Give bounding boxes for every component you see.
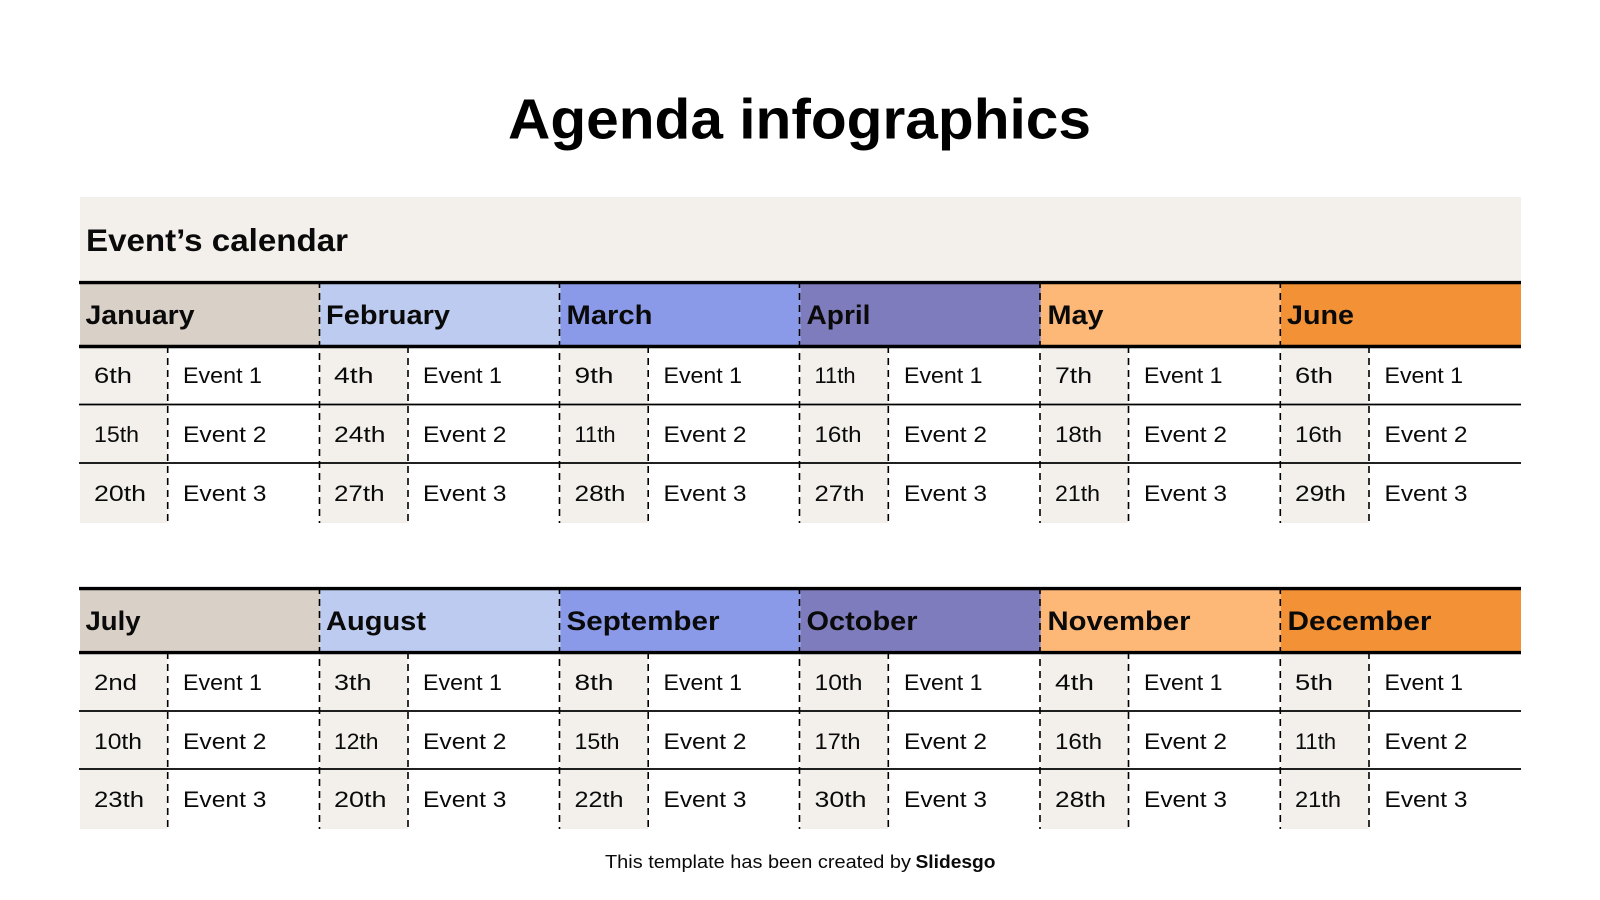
- panel: August: Event 2: [423, 729, 506, 754]
- panel: September: September: [566, 606, 720, 636]
- panel: March: 9th: [574, 363, 614, 388]
- panel: July: 23th: [94, 787, 144, 812]
- panel: October: Event 2: [904, 729, 987, 754]
- panel: September: 8th: [574, 670, 614, 695]
- panel: December: December: [1288, 606, 1432, 636]
- panel: January: 6th: [94, 363, 132, 388]
- panel: January: January: [86, 300, 195, 330]
- panel: October: [801, 589, 1041, 829]
- panel: August: 20th: [334, 787, 386, 812]
- panel: June: Event 3: [1384, 481, 1468, 506]
- panel: June: Event 2: [1384, 422, 1468, 447]
- panel: November: 4th: [1055, 670, 1094, 695]
- title: Agenda infographics: [508, 88, 1091, 152]
- panel: August: August: [326, 606, 426, 636]
- panel: June: 6th: [1295, 363, 1333, 388]
- panel: April: Event 3: [904, 481, 987, 506]
- panel: November: Event 1: [1144, 670, 1222, 695]
- panel: May: Event 1: [1144, 363, 1222, 388]
- panel: April: Event 1: [904, 363, 982, 388]
- panel: February: 27th: [334, 481, 384, 506]
- panel: May: 18th: [1055, 422, 1102, 447]
- panel: July: 10th: [94, 729, 142, 754]
- panel: July: Event 2: [183, 729, 266, 754]
- panel: August: Event 3: [423, 787, 506, 812]
- panel: January: Event 3: [183, 481, 266, 506]
- panel: February: Event 3: [423, 481, 506, 506]
- panel: November: [1041, 589, 1281, 829]
- panel: July: 2nd: [94, 670, 137, 695]
- panel: May: Event 3: [1144, 481, 1227, 506]
- footer credit: Slidesgo: [916, 852, 996, 872]
- panel: September: Event 3: [664, 787, 746, 812]
- panel: December: 11th: [1295, 729, 1336, 754]
- panel: December: Event 1: [1384, 670, 1463, 695]
- panel: March: Event 1: [664, 363, 742, 388]
- panel: October: Event 1: [904, 670, 982, 695]
- panel: March: [560, 283, 801, 523]
- panel: September: 22th: [574, 787, 624, 812]
- panel: March: March: [566, 300, 652, 330]
- panel: April: April: [806, 300, 870, 330]
- panel: January: 20th: [94, 481, 146, 506]
- panel: February: Event 2: [423, 422, 506, 447]
- panel: April: 27th: [814, 481, 864, 506]
- panel: April: 11th: [814, 363, 856, 388]
- panel: October: October: [806, 606, 918, 636]
- panel: May: [1041, 283, 1281, 523]
- panel: April: [801, 283, 1041, 523]
- panel: November: Event 2: [1144, 729, 1227, 754]
- panel: April: 16th: [814, 422, 862, 447]
- panel: June: [1281, 283, 1521, 523]
- panel: July: [80, 589, 320, 829]
- footer credit: This template has been created by: [605, 852, 911, 872]
- panel: June: Event 1: [1384, 363, 1463, 388]
- panel: September: Event 1: [664, 670, 742, 695]
- panel: July: July: [86, 606, 141, 636]
- panel: March: Event 3: [664, 481, 746, 506]
- panel: November: November: [1048, 606, 1190, 636]
- panel: August: [320, 589, 560, 829]
- panel: June: 29th: [1295, 481, 1346, 506]
- panel: January: 15th: [94, 422, 139, 447]
- panel: June: 16th: [1295, 422, 1342, 447]
- panel: October: Event 3: [904, 787, 987, 812]
- panel: December: Event 3: [1384, 787, 1468, 812]
- panel: December: Event 2: [1384, 729, 1468, 754]
- panel: November: 28th: [1055, 787, 1106, 812]
- panel: January: [80, 283, 320, 523]
- panel: June: June: [1287, 300, 1354, 330]
- panel: February: Event 1: [423, 363, 502, 388]
- panel: September: 15th: [574, 729, 620, 754]
- panel: October: 17th: [814, 729, 860, 754]
- panel: May: 21th: [1055, 481, 1100, 506]
- panel: December: [1281, 589, 1521, 829]
- panel: October: 30th: [814, 787, 866, 812]
- panel: October: 10th: [814, 670, 862, 695]
- panel: May: May: [1048, 300, 1104, 330]
- panel: February: [320, 283, 560, 523]
- panel: May: 7th: [1055, 363, 1092, 388]
- panel: July: Event 1: [183, 670, 262, 695]
- panel: May: Event 2: [1144, 422, 1227, 447]
- panel: August: 3th: [334, 670, 372, 695]
- panel: November: 16th: [1055, 729, 1102, 754]
- panel: January: Event 1: [183, 363, 262, 388]
- panel: January: Event 2: [183, 422, 266, 447]
- panel: March: Event 2: [664, 422, 746, 447]
- panel: August: 12th: [334, 729, 378, 754]
- panel: August: Event 1: [423, 670, 502, 695]
- panel: September: [560, 589, 801, 829]
- panel: event's calendar heading: Event’s calendar: [86, 222, 348, 258]
- panel: December: 21th: [1295, 787, 1341, 812]
- panel: November: Event 3: [1144, 787, 1227, 812]
- panel: February: 24th: [334, 422, 386, 447]
- panel: February: February: [326, 300, 450, 330]
- panel: July: Event 3: [183, 787, 266, 812]
- panel: February: 4th: [334, 363, 374, 388]
- panel: March: 28th: [574, 481, 626, 506]
- panel: September: Event 2: [664, 729, 746, 754]
- panel: March: 11th: [574, 422, 616, 447]
- panel: December: 5th: [1295, 670, 1333, 695]
- panel: event's calendar heading: [80, 197, 1521, 283]
- panel: April: Event 2: [904, 422, 987, 447]
